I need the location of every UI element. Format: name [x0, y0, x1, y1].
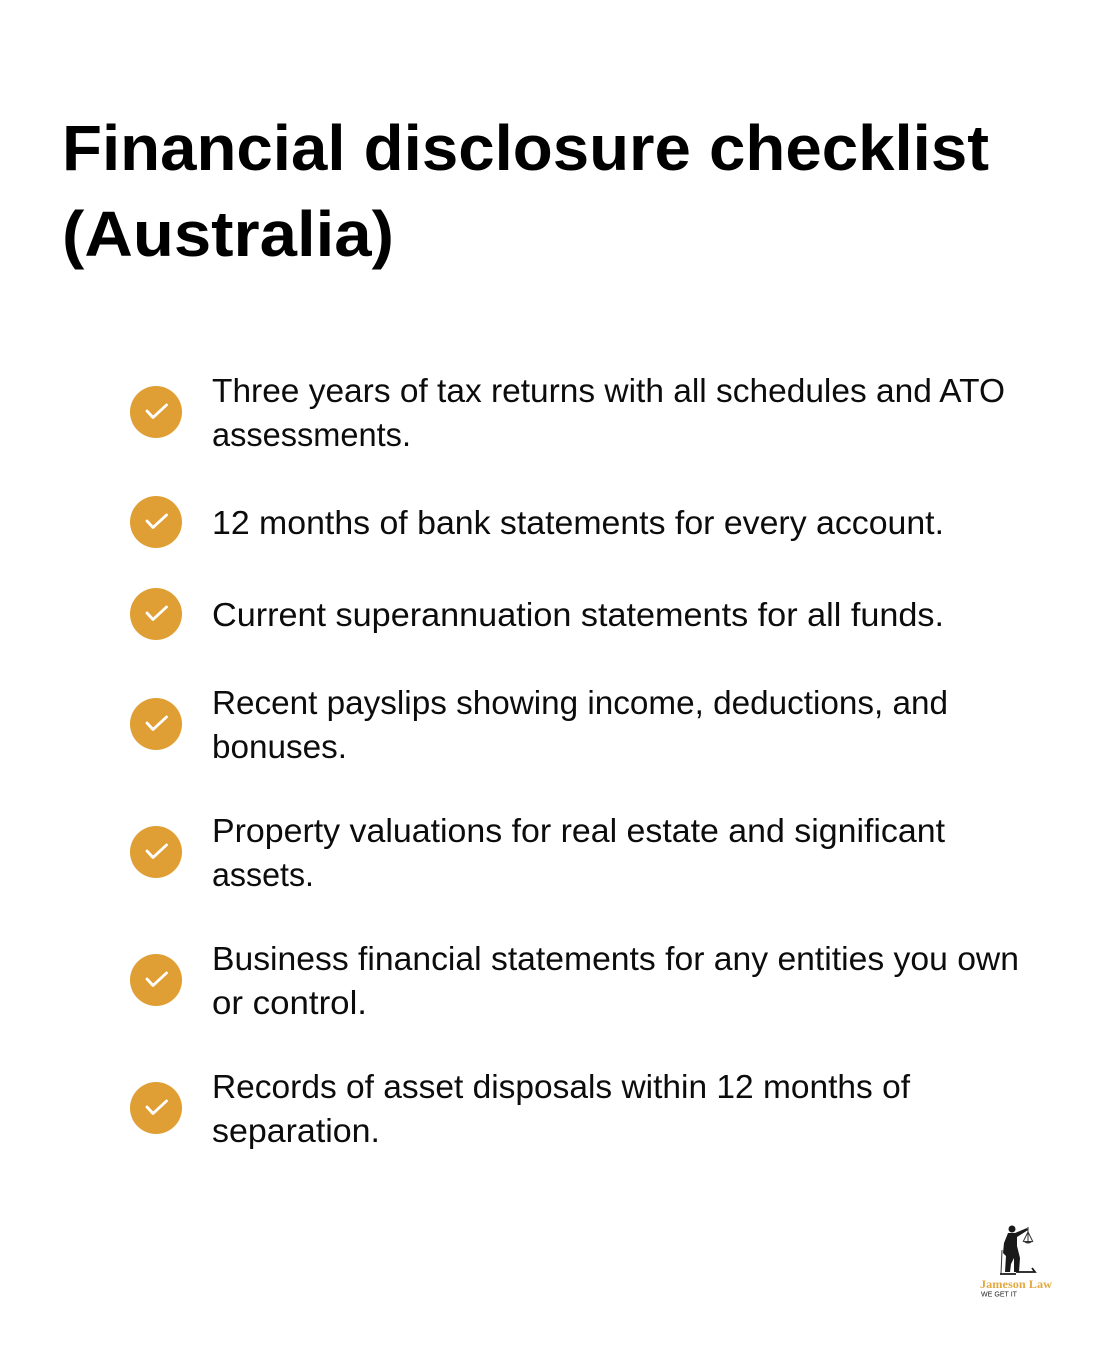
logo name: Jameson Law — [980, 1277, 1052, 1291]
item: payslips — [130, 684, 948, 765]
item: property valuations: Property valuations for real estate and significant — [212, 812, 945, 849]
icon: lady justice — [1000, 1226, 1035, 1274]
title — [62, 112, 989, 270]
item: superannuation: Current superannuation statements for all funds. — [212, 596, 944, 633]
item: bank statements — [130, 496, 944, 548]
item: asset disposals: separation. — [212, 1112, 380, 1149]
title: Financial disclosure checklist — [62, 112, 989, 184]
logo: Jameson Law — [980, 1226, 1052, 1298]
item: business statements: Business financial statements for any entities you own — [212, 940, 1019, 977]
item: payslips: bonuses. — [212, 728, 347, 765]
item: tax returns: Three years of tax returns with all schedules and ATO — [212, 372, 1005, 409]
item: business statements — [130, 940, 1019, 1021]
item: property valuations: assets. — [212, 856, 314, 893]
item: asset disposals: Records of asset disposals within 12 months of — [212, 1068, 911, 1105]
item: payslips: Recent payslips showing income, deductions, and — [212, 684, 948, 721]
item: property valuations — [130, 812, 945, 893]
item: tax returns: assessments. — [212, 416, 411, 453]
title: (Australia) — [62, 198, 394, 270]
logo tagline: WE GET IT — [981, 1292, 1018, 1298]
item: bank statements: 12 months of bank statements for every account. — [212, 504, 944, 541]
item: superannuation — [130, 588, 944, 640]
item: asset disposals — [130, 1068, 911, 1149]
checklist — [130, 372, 1019, 1149]
item: business statements: or control. — [212, 984, 367, 1021]
item: tax returns — [130, 372, 1005, 453]
